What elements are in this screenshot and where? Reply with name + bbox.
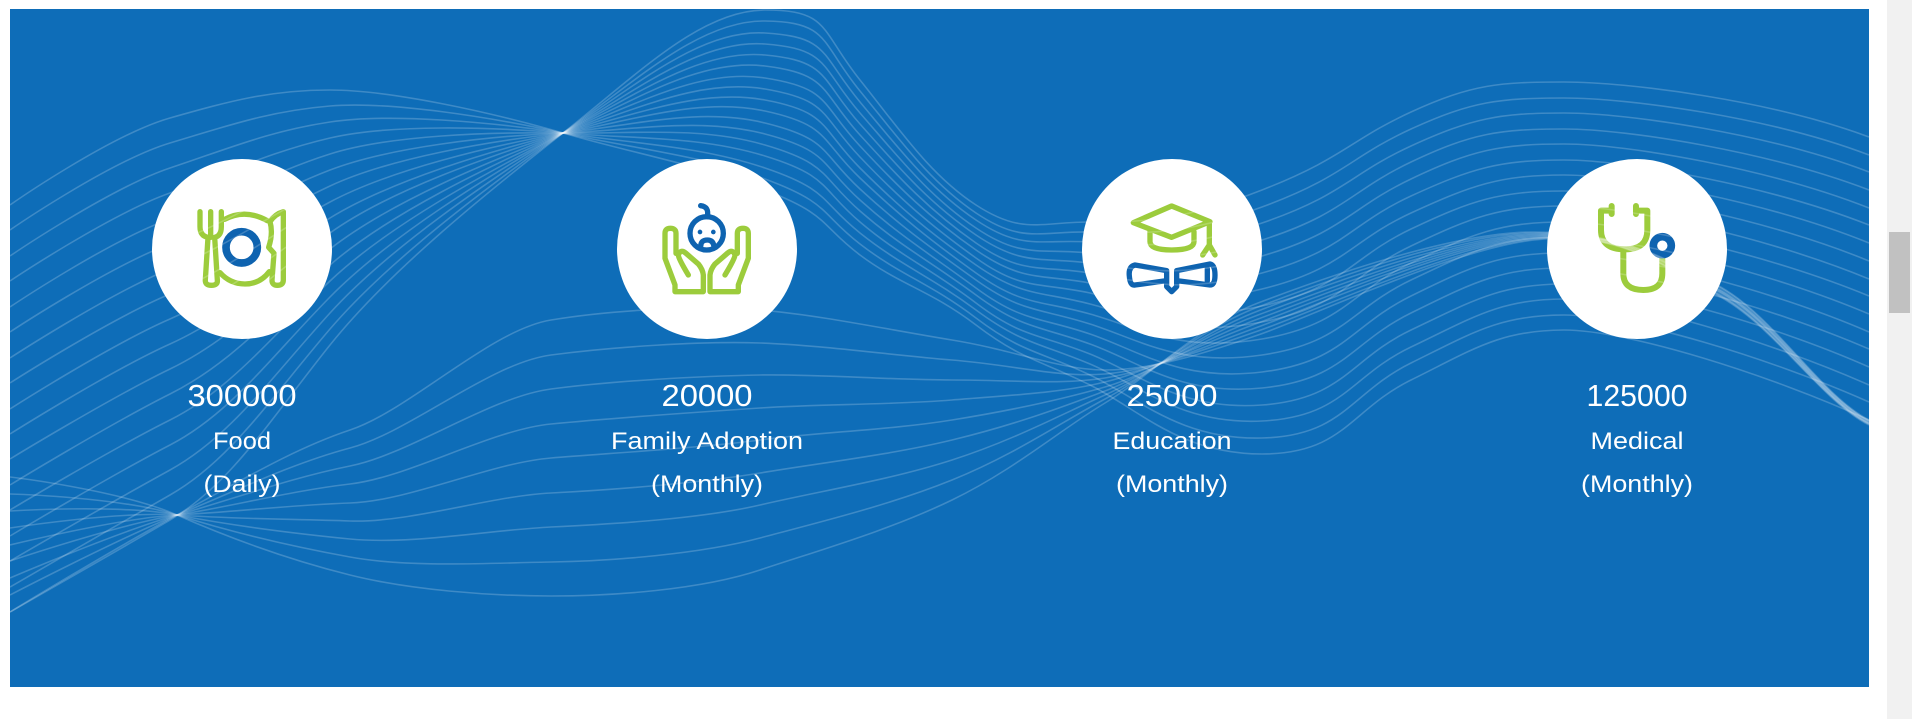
icon: fork, plate and knife xyxy=(200,212,283,285)
icon circle: family adoption xyxy=(617,159,797,339)
stat: food xyxy=(152,159,332,498)
stat: education xyxy=(1082,159,1262,498)
label: Food: Food xyxy=(213,428,271,455)
label: Family Adoption: Family Adoption xyxy=(611,428,803,455)
icon circle: medical xyxy=(1547,159,1727,339)
icon: stethoscope xyxy=(1601,206,1671,290)
label: Education: Education xyxy=(1112,428,1232,455)
value: 125000: 125000 xyxy=(1586,378,1688,413)
icon: graduation cap and diploma xyxy=(1129,206,1215,292)
icon circle: education xyxy=(1082,159,1262,339)
period: Monthly: (Monthly) xyxy=(1116,471,1228,498)
stat: family adoption xyxy=(611,159,803,498)
period: Monthly: (Monthly) xyxy=(651,471,763,498)
value: 20000: 20000 xyxy=(662,378,752,413)
label: Medical: Medical xyxy=(1590,428,1684,455)
period: Monthly: (Monthly) xyxy=(1581,471,1693,498)
value: 25000: 25000 xyxy=(1126,378,1218,413)
icon circle: food xyxy=(152,159,332,339)
value: 300000: 300000 xyxy=(188,378,296,413)
stat: medical xyxy=(1547,159,1727,498)
scrollbar xyxy=(1887,0,1912,719)
icon: baby in hands xyxy=(665,206,748,292)
period: Daily: (Daily) xyxy=(204,471,280,498)
